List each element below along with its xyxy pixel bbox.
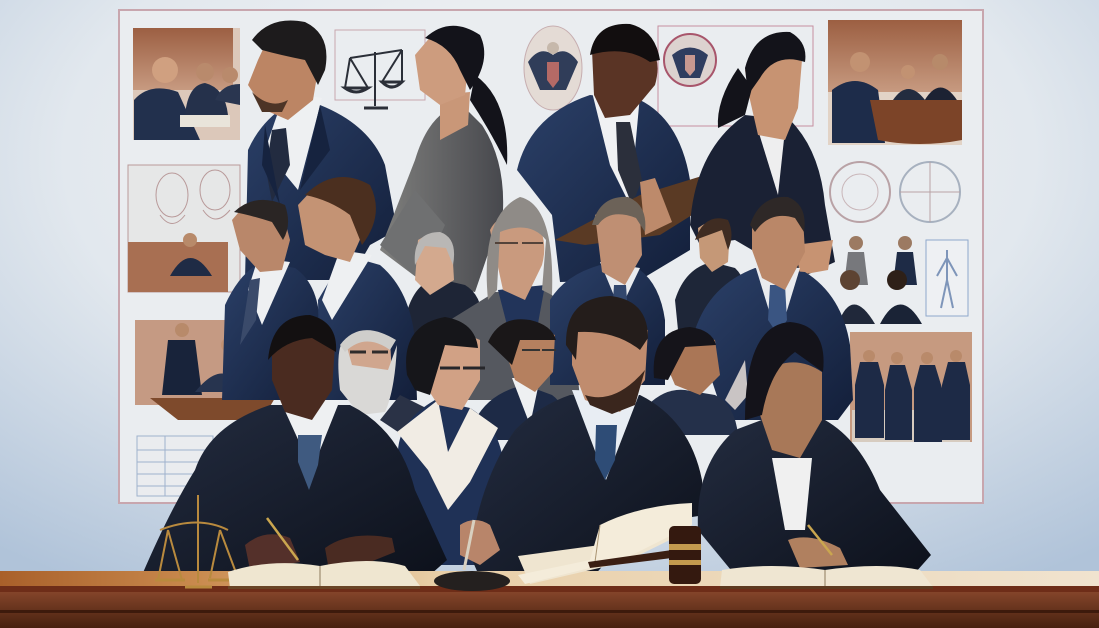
figure: man, back row, dark skin with notepad xyxy=(517,24,728,282)
icon: large open book xyxy=(518,503,692,584)
figure: man, middle row left xyxy=(222,200,320,400)
icon: balance scales sketch xyxy=(335,30,425,108)
figure: robed man, front left writing xyxy=(142,315,447,575)
vignette: courtroom lower left xyxy=(135,320,275,420)
desk xyxy=(0,571,1099,628)
icon: eagle seal two xyxy=(664,34,716,86)
vignette: courtroom top right xyxy=(828,20,962,145)
vignette: group of lawyers right xyxy=(850,332,972,442)
figure: small grey-haired woman, middle row xyxy=(405,232,482,345)
figure: old man with white beard xyxy=(338,330,430,440)
vignette: anatomy sketches and judge xyxy=(128,165,240,292)
figure: woman, middle row left xyxy=(298,177,417,400)
figure: woman, back row right xyxy=(690,32,835,278)
figure: woman, right of front row xyxy=(648,327,748,435)
vignette: diagrams and figure right xyxy=(830,162,968,324)
figure: woman with glasses, grey jacket xyxy=(450,197,580,400)
figure: woman in black suit, front right writing xyxy=(698,322,931,575)
vignette: form table lower left xyxy=(137,436,213,496)
icon: gavel xyxy=(588,526,701,584)
figure: woman with glasses, ponytail bun xyxy=(475,319,566,440)
figure: man, right of middle row xyxy=(695,197,853,420)
figure: woman, back row, grey jacket xyxy=(380,26,507,292)
icon: open book right xyxy=(720,566,933,589)
figure: woman with glasses, centre front xyxy=(397,317,505,565)
icon: brass scales on desk xyxy=(155,495,240,587)
icon: inkwell base with pen xyxy=(434,520,510,591)
figure: man, back row left xyxy=(245,20,397,280)
poster panel xyxy=(119,10,983,503)
figure: small woman, right middle row xyxy=(675,218,748,350)
figure: man, grey hair, middle row xyxy=(550,197,665,385)
vignette: courtroom top left xyxy=(133,28,240,140)
icon: open book left xyxy=(228,561,420,589)
figure: bearded robed man, front centre xyxy=(460,296,705,580)
icon: eagle seal one xyxy=(524,26,582,110)
